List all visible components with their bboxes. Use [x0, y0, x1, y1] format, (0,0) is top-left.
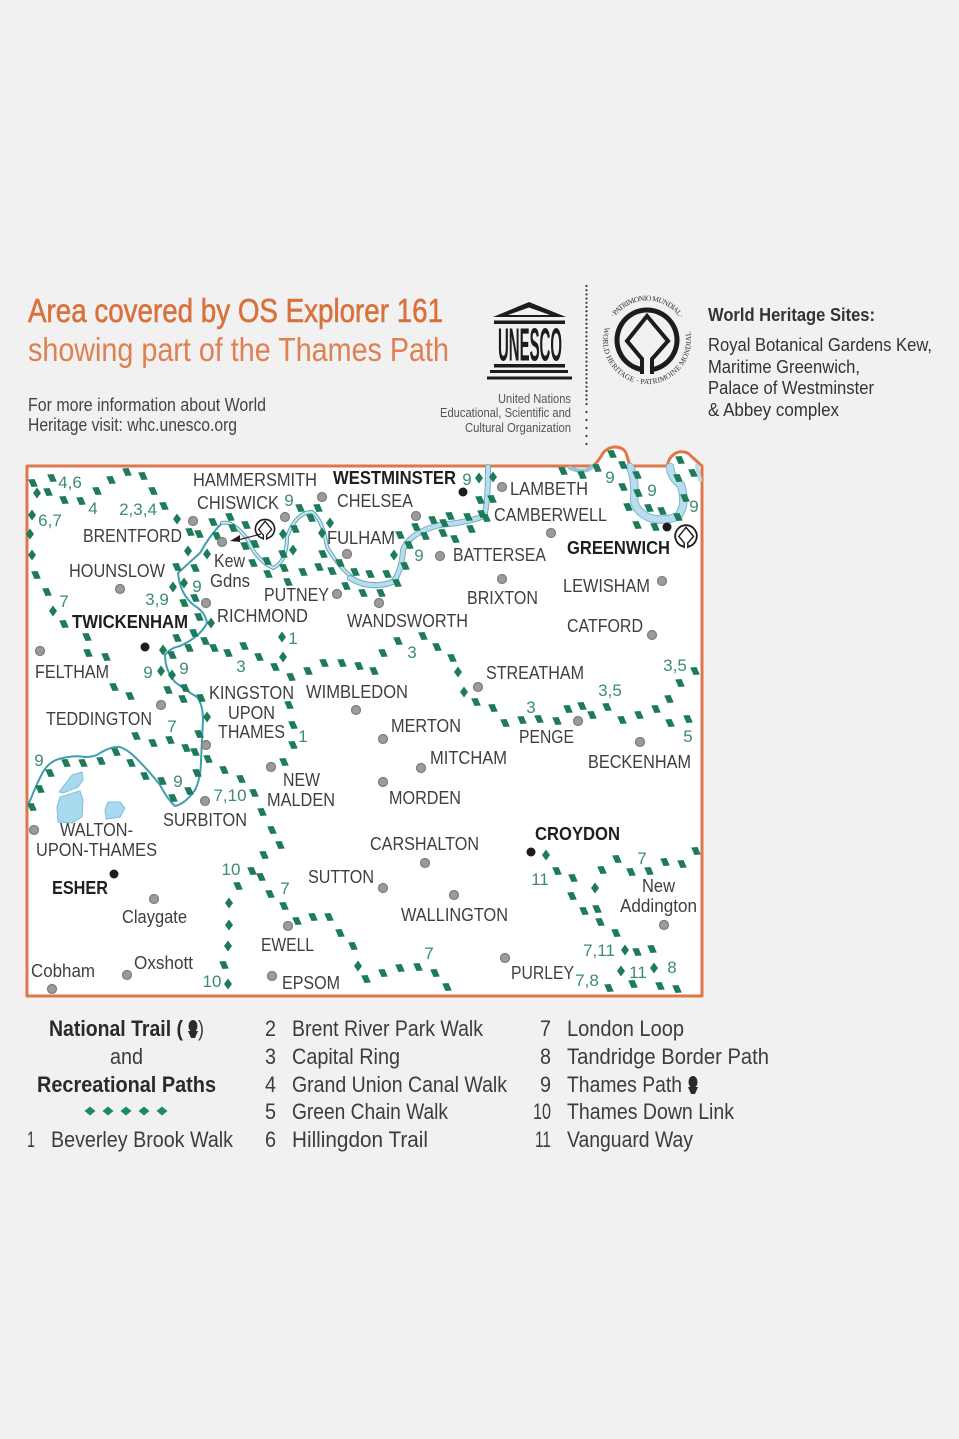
route numbers: 9 — [647, 481, 657, 500]
route numbers: 8 — [667, 958, 677, 977]
legend: column 3: 8 — [540, 1044, 551, 1069]
place names: PENGE — [519, 726, 574, 747]
route numbers: 7,8 — [575, 971, 599, 990]
route numbers: 6,7 — [38, 511, 62, 530]
legend: column 1: Beverley Brook Walk — [51, 1127, 234, 1152]
place names: Kew — [214, 550, 246, 571]
place names: PUTNEY — [264, 584, 329, 605]
route numbers: 9 — [34, 751, 44, 770]
place names — [31, 469, 697, 993]
legend: column 2: Hillingdon Trail — [292, 1127, 428, 1152]
World Heritage Sites text: World Heritage Sites: — [708, 305, 875, 325]
legend: column 3: 11 — [535, 1127, 551, 1152]
place names: RICHMOND — [217, 605, 308, 626]
title — [28, 292, 449, 368]
place names: UPON — [228, 702, 275, 723]
title: Area covered by OS Explorer 161 — [28, 292, 443, 329]
legend: column 2 — [265, 1016, 508, 1152]
route numbers: 1 — [288, 629, 298, 648]
route numbers: 9 — [462, 470, 472, 489]
route numbers: 10 — [203, 972, 221, 991]
icon: Greenwich world heritage marker — [675, 525, 697, 548]
route numbers: 3,9 — [145, 590, 169, 609]
title: showing part of the Thames Path — [28, 331, 449, 368]
legend: column 3 — [533, 1016, 769, 1152]
route numbers: 7 — [424, 944, 434, 963]
place names: HAMMERSMITH — [193, 469, 317, 490]
legend: column 3: 7 — [540, 1016, 551, 1041]
route numbers: 7,11 — [583, 941, 615, 960]
place names: Cobham — [31, 960, 95, 981]
place names: CATFORD — [567, 615, 643, 636]
legend: heading: and — [110, 1044, 143, 1069]
arrow: Kew Gardens pointer — [230, 534, 261, 542]
route numbers — [34, 468, 699, 991]
route numbers: 10 — [222, 860, 240, 879]
UNESCO caption: United Nations — [498, 392, 571, 406]
river Thames — [28, 466, 700, 806]
place names: KINGSTON — [209, 682, 294, 703]
map frame — [27, 447, 702, 996]
place names: BATTERSEA — [453, 544, 547, 565]
place names: CAMBERWELL — [494, 504, 607, 525]
major place names — [52, 467, 670, 898]
more information text: For more information about World — [28, 395, 266, 415]
major place names: ESHER — [52, 877, 108, 898]
route numbers: 3,5 — [598, 681, 622, 700]
route numbers: 4,6 — [58, 473, 82, 492]
legend: trail symbol — [84, 1106, 168, 1116]
place names: FELTHAM — [35, 661, 109, 682]
legend: column 3: 9 — [540, 1072, 551, 1097]
icon: UNESCO temple logo: UNESCO — [498, 319, 562, 371]
place names: BRENTFORD — [83, 525, 182, 546]
place names: EPSOM — [282, 972, 340, 993]
legend: heading: National Trail ( — [49, 1016, 184, 1041]
legend: column 2: 4 — [265, 1072, 276, 1097]
route numbers: 11 — [629, 963, 647, 982]
legend: column 2: 6 — [265, 1127, 276, 1152]
place names: Oxshott — [134, 952, 193, 973]
route numbers: 9 — [414, 546, 424, 565]
icon: acorn — [188, 1020, 198, 1038]
legend: column 3: Tandridge Border Path — [567, 1044, 769, 1069]
more information text — [28, 395, 266, 435]
World Heritage Sites text: Palace of Westminster — [708, 378, 874, 398]
legend: column 2: Green Chain Walk — [292, 1099, 449, 1124]
major town markers — [110, 488, 672, 878]
legend: column 2: 2 — [265, 1016, 276, 1041]
legend: column 2: 3 — [265, 1044, 276, 1069]
legend: heading — [37, 1016, 216, 1097]
place names: STREATHAM — [486, 662, 584, 683]
major place names: CROYDON — [535, 823, 620, 844]
place names: WIMBLEDON — [306, 681, 408, 702]
World Heritage Sites text: & Abbey complex — [708, 400, 839, 420]
legend: column 3: 10 — [533, 1099, 551, 1124]
route numbers: 7 — [637, 849, 647, 868]
legend: column 3: Thames Down Link — [567, 1099, 735, 1124]
World Heritage Sites text: Royal Botanical Gardens Kew, — [708, 335, 932, 355]
route numbers: 1 — [298, 727, 308, 746]
place names: CARSHALTON — [370, 833, 479, 854]
UNESCO caption: Cultural Organization — [465, 421, 571, 435]
panel: map — [26, 447, 702, 996]
legend: heading: Recreational Paths — [37, 1072, 216, 1097]
major place names: GREENWICH — [567, 537, 670, 558]
place names: SUTTON — [308, 866, 374, 887]
route numbers: 9 — [284, 491, 294, 510]
legend: column 2: Grand Union Canal Walk — [292, 1072, 508, 1097]
lakes — [57, 772, 125, 823]
place names: TEDDINGTON — [46, 708, 152, 729]
place names: New — [642, 875, 676, 896]
route numbers: 7,10 — [213, 786, 247, 805]
route numbers: 11 — [531, 870, 549, 889]
place names: WANDSWORTH — [347, 610, 468, 631]
more information text: Heritage visit: whc.unesco.org — [28, 415, 237, 435]
route numbers: 4 — [88, 499, 98, 518]
route numbers: 9 — [173, 772, 183, 791]
legend: column 1: 1 — [27, 1127, 35, 1152]
place names: MORDEN — [389, 787, 461, 808]
place names: MERTON — [391, 715, 461, 736]
place names: FULHAM — [327, 527, 395, 548]
route numbers: 7 — [280, 879, 290, 898]
place names: MALDEN — [267, 789, 335, 810]
place names: SURBITON — [163, 809, 247, 830]
World Heritage Sites text — [708, 305, 932, 420]
route numbers: 7 — [59, 592, 69, 611]
World Heritage Sites text: Maritime Greenwich, — [708, 357, 860, 377]
place names: EWELL — [261, 934, 314, 955]
icon: World Heritage emblem: WORLD HERITAGE · PATRIMOINE MONDIAL — [603, 328, 691, 384]
route numbers: 3 — [526, 698, 536, 717]
icon: World Heritage emblem — [603, 296, 691, 384]
town markers — [30, 482, 668, 994]
route numbers: 2,3,4 — [119, 500, 157, 519]
legend: column 2: Brent River Park Walk — [292, 1016, 484, 1041]
route numbers: 9 — [192, 577, 202, 596]
legend: column 3: Vanguard Way — [567, 1127, 693, 1152]
place names: LEWISHAM — [563, 575, 650, 596]
legend: heading: ) — [198, 1016, 204, 1041]
place names: Addington — [620, 895, 697, 916]
route numbers: 9 — [143, 663, 153, 682]
place names: BRIXTON — [467, 587, 538, 608]
major place names: TWICKENHAM — [72, 611, 188, 632]
route numbers: 5 — [683, 727, 693, 746]
UNESCO caption — [440, 392, 571, 435]
trail markers: recreational paths — [26, 450, 701, 993]
place names: WALTON- — [60, 819, 133, 840]
place names: PURLEY — [511, 962, 574, 983]
legend: column 2: 5 — [265, 1099, 276, 1124]
route numbers: 9 — [179, 659, 189, 678]
UNESCO caption: Educational, Scientific and — [440, 406, 571, 420]
legend: column 3: London Loop — [567, 1016, 684, 1041]
legend: column 3: Thames Path — [567, 1072, 682, 1097]
place names: NEW — [283, 769, 320, 790]
place names: UPON-THAMES — [36, 839, 157, 860]
place names: BECKENHAM — [588, 751, 691, 772]
icon: Kew world heritage marker — [255, 519, 275, 540]
legend: column 2: Capital Ring — [292, 1044, 400, 1069]
place names: LAMBETH — [510, 478, 588, 499]
route numbers: 7 — [167, 717, 177, 736]
icon: UNESCO temple logo — [487, 302, 572, 380]
route numbers: 9 — [605, 468, 615, 487]
icon: World Heritage emblem: · PATRIMONIO MUNDIAL · — [612, 296, 682, 316]
icon: acorn small — [688, 1076, 698, 1094]
route numbers: 3 — [236, 657, 246, 676]
route numbers: 3,5 — [663, 656, 687, 675]
major place names: WESTMINSTER — [333, 467, 456, 488]
place names: WALLINGTON — [401, 904, 508, 925]
place names: HOUNSLOW — [69, 560, 165, 581]
place names: MITCHAM — [430, 747, 507, 768]
place names: Claygate — [122, 906, 187, 927]
place names: THAMES — [218, 721, 285, 742]
place names: CHISWICK — [197, 492, 280, 513]
place names: CHELSEA — [337, 490, 414, 511]
route numbers: 3 — [407, 643, 417, 662]
place names: Gdns — [210, 570, 250, 591]
route numbers: 9 — [689, 497, 699, 516]
